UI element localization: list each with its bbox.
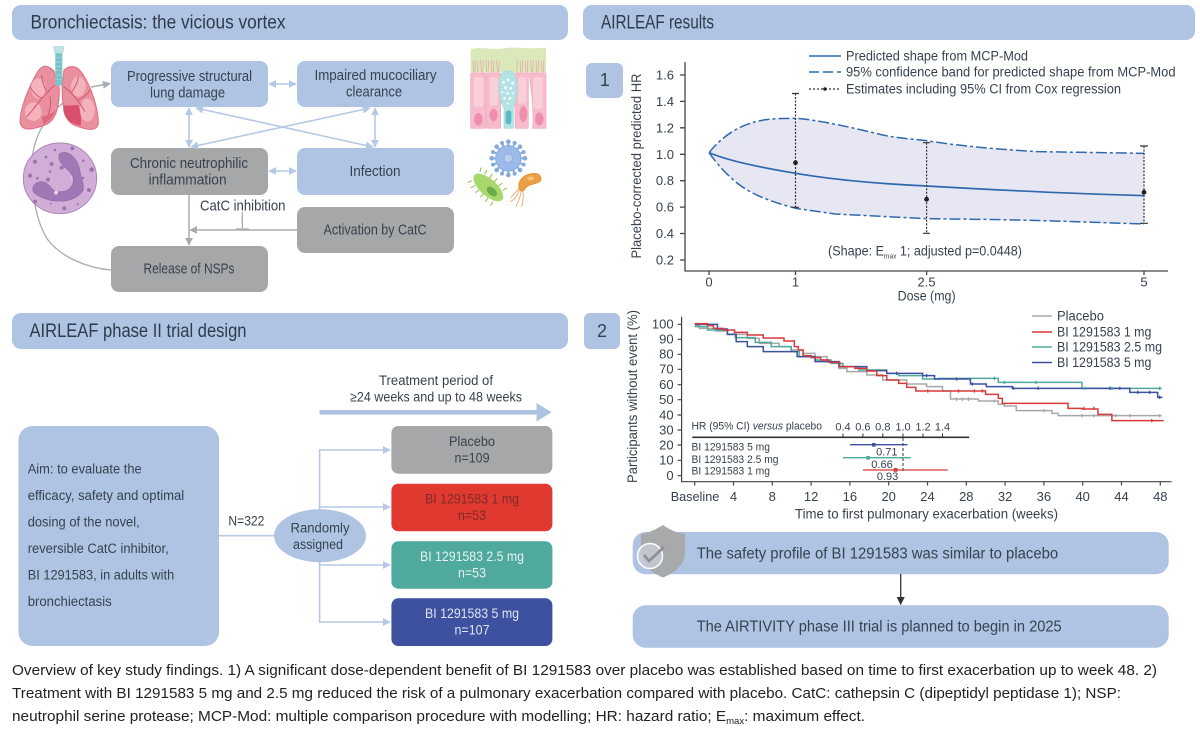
heading: results bbox=[583, 5, 1195, 40]
badge: 2 bbox=[584, 313, 620, 349]
node: randomly assigned: assigned bbox=[293, 537, 343, 552]
legend bbox=[1032, 308, 1162, 370]
chart: dose response bbox=[629, 48, 1176, 304]
x axis tick labels: 28 bbox=[959, 489, 974, 504]
arm: 2.5 mg bbox=[391, 541, 552, 589]
axes bbox=[680, 62, 1168, 275]
y axis title: Placebo-corrected predicted HR bbox=[629, 73, 644, 258]
y axis title: Participants without event (%) bbox=[625, 310, 640, 483]
box: study aim: efficacy, safety and optimal bbox=[28, 488, 184, 503]
box: study aim: BI 1291583, in adults with bbox=[28, 568, 174, 582]
box: structural lung damage: lung damage bbox=[150, 86, 225, 102]
inset: hazard ratio forest plot bbox=[692, 420, 969, 483]
x axis tick labels: 48 bbox=[1153, 489, 1168, 504]
inset: hazard ratio forest plot: BI 1291583 2.5 mg bbox=[692, 454, 778, 466]
badge: 1: 1 bbox=[600, 70, 610, 90]
box: infection: Infection bbox=[350, 164, 400, 180]
icon: bacterium bbox=[466, 166, 511, 209]
y axis tick labels: 80 bbox=[659, 347, 674, 362]
y axis tick labels: 0.2 bbox=[656, 252, 674, 268]
x axis tick labels: 8 bbox=[769, 489, 776, 504]
icon: virus bbox=[489, 139, 527, 177]
box: activation by CatC bbox=[297, 207, 454, 253]
box: impaired clearance bbox=[297, 61, 454, 107]
y axis tick labels: 90 bbox=[659, 332, 674, 347]
label: treatment period: ≥24 weeks and up to 48 weeks bbox=[350, 390, 522, 404]
y axis tick labels: 10 bbox=[659, 453, 674, 468]
label: treatment period: Treatment period of bbox=[379, 373, 493, 388]
arm: 2.5 mg: BI 1291583 2.5 mg bbox=[420, 549, 524, 564]
y axis tick labels: 0.4 bbox=[656, 226, 674, 241]
arm: 5 mg bbox=[391, 598, 552, 646]
x axis tick labels: Baseline bbox=[671, 489, 719, 504]
legend: Placebo bbox=[1057, 308, 1104, 324]
heading: vortex: Bronchiectasis: the vicious vortex bbox=[30, 12, 286, 34]
box: impaired clearance: Impaired mucociliary bbox=[314, 68, 437, 84]
x axis tick labels: 40 bbox=[1075, 489, 1090, 504]
x axis tick labels: 32 bbox=[998, 489, 1012, 504]
inset: hazard ratio forest plot: 1.2 bbox=[915, 422, 931, 434]
inset: hazard ratio forest plot: BI 1291583 5 mg bbox=[692, 442, 770, 454]
arrow: inflammation to NSP release bbox=[188, 195, 190, 245]
panel: trial design bbox=[12, 313, 568, 646]
y axis tick labels: 1.2 bbox=[656, 120, 674, 135]
legend: BI 1291583 1 mg bbox=[1057, 324, 1151, 340]
inset: hazard ratio forest plot: 0.66 bbox=[871, 459, 893, 471]
x axis tick labels: 16 bbox=[843, 489, 857, 504]
arm: placebo: Placebo bbox=[449, 434, 495, 449]
icon: neutrophil bbox=[23, 143, 97, 214]
y axis tick labels: 40 bbox=[659, 407, 674, 422]
icon: lungs bbox=[20, 47, 98, 129]
x axis tick labels bbox=[705, 274, 1148, 290]
box: release of NSPs bbox=[111, 246, 268, 292]
callout: safety profile bbox=[633, 532, 1169, 574]
inset: hazard ratio forest plot: HR (95% CI) versus placebo bbox=[692, 420, 822, 432]
node: randomly assigned: Randomly bbox=[290, 520, 350, 536]
node: randomly assigned bbox=[274, 509, 366, 562]
label: treatment period bbox=[350, 373, 522, 404]
arm: placebo bbox=[391, 426, 552, 474]
box: structural lung damage: Progressive structural bbox=[127, 69, 252, 85]
arrow: treatment period bbox=[320, 403, 552, 422]
y axis tick labels: 1.0 bbox=[656, 147, 674, 162]
arm: 2.5 mg: n=53 bbox=[458, 566, 486, 580]
heading: trial design bbox=[12, 313, 568, 349]
x axis tick labels: 36 bbox=[1037, 489, 1051, 504]
label: CatC inhibition: CatC inhibition bbox=[200, 198, 286, 214]
arm: 5 mg: n=107 bbox=[454, 622, 490, 638]
x axis tick labels: 1 bbox=[792, 274, 799, 290]
panel: vicious vortex bbox=[12, 5, 568, 292]
heading: results: AIRLEAF results bbox=[601, 12, 714, 34]
annotation: shape: (Shape: E bbox=[828, 244, 888, 258]
caption: overview of findings: : maximum effect. bbox=[744, 709, 865, 725]
badge: 1 bbox=[586, 63, 623, 98]
heading: trial design: AIRLEAF phase II trial design bbox=[30, 321, 246, 342]
caption: overview of findings: Overview of key study findings. 1) A significant dose-dependent benefit of BI 1291583 over placebo was established based on time to first exacerbation up to week 48. 2) bbox=[12, 663, 1157, 679]
callout: phase III: The AIRTIVITY phase III trial is planned to begin in 2025 bbox=[697, 618, 1062, 636]
inset: hazard ratio forest plot: 0.71 bbox=[876, 446, 898, 458]
box: neutrophilic inflammation: Chronic neutrophilic bbox=[130, 156, 248, 172]
y axis tick labels: 70 bbox=[659, 362, 674, 377]
band and predicted lines bbox=[709, 118, 1144, 224]
legend: BI 1291583 5 mg bbox=[1057, 355, 1151, 370]
arrows: allocation tree bbox=[320, 450, 390, 622]
box: release of NSPs: Release of NSPs bbox=[144, 262, 234, 278]
box: study aim: bronchiectasis bbox=[28, 594, 112, 609]
callout: safety profile: The safety profile of BI 1291583 was similar to placebo bbox=[697, 546, 1058, 562]
box: impaired clearance: clearance bbox=[346, 84, 402, 100]
x axis tick labels: 44 bbox=[1114, 489, 1129, 504]
y axis tick labels: 0 bbox=[666, 468, 674, 483]
y axis tick labels: 0.6 bbox=[656, 200, 674, 215]
y axis tick labels bbox=[652, 317, 674, 483]
box: study aim: Aim: to evaluate the bbox=[28, 462, 142, 476]
arm: 1 mg bbox=[391, 484, 552, 531]
annotation: shape: 1; adjusted p=0.0448) bbox=[896, 244, 1022, 258]
label: N=322: N=322 bbox=[228, 514, 264, 528]
panel: AIRLEAF results bbox=[583, 5, 1195, 648]
arm: 5 mg: BI 1291583 5 mg bbox=[425, 606, 519, 621]
y axis tick labels: 60 bbox=[659, 377, 674, 392]
y axis tick labels: 100 bbox=[652, 317, 674, 332]
legend: BI 1291583 2.5 mg bbox=[1057, 340, 1162, 354]
arm: 1 mg: BI 1291583 1 mg bbox=[425, 492, 519, 506]
x axis tick labels: 12 bbox=[804, 489, 818, 504]
arrow: activation by CatC bbox=[190, 229, 297, 231]
x axis tick labels: 5 bbox=[1140, 274, 1148, 290]
inset: hazard ratio forest plot: 0.4 bbox=[835, 422, 851, 434]
x axis tick labels: 24 bbox=[920, 489, 935, 504]
y axis tick labels: 0.8 bbox=[656, 173, 674, 188]
y axis tick labels bbox=[656, 68, 674, 268]
y axis tick labels: 20 bbox=[659, 437, 674, 452]
connector: aim to randomisation bbox=[219, 535, 275, 537]
inset: hazard ratio forest plot: 0.8 bbox=[875, 422, 890, 434]
caption: overview of findings: neutrophil serine protease; MCP-Mod: multiple comparison procedure with modelling; HR: hazard ratio; E bbox=[12, 709, 687, 725]
survival curves bbox=[695, 324, 1164, 422]
inset: hazard ratio forest plot: 0.6 bbox=[855, 422, 871, 434]
legend: Estimates including 95% CI from Cox regression bbox=[846, 82, 1121, 96]
y axis tick labels: 1.4 bbox=[656, 94, 674, 109]
x axis tick labels bbox=[671, 489, 1168, 504]
badge: 2: 2 bbox=[597, 321, 607, 341]
y axis tick labels: 50 bbox=[659, 392, 674, 407]
caption: overview of findings bbox=[12, 663, 1157, 726]
box: infection bbox=[297, 148, 454, 195]
caption: overview of findings: Treatment with BI 1291583 5 mg and 2.5 mg reduced the risk of a pulmonary exacerbation compared with placebo. CatC: cathepsin C (dipeptidyl peptidase 1); NSP: bbox=[12, 686, 1121, 702]
legend: Predicted shape from MCP-Mod bbox=[846, 48, 1028, 64]
x axis tick labels: 0 bbox=[705, 274, 713, 290]
y axis tick labels: 30 bbox=[659, 422, 674, 437]
box: neutrophilic inflammation bbox=[111, 148, 268, 195]
x axis title: Time to first pulmonary exacerbation (weeks) bbox=[795, 506, 1058, 522]
box: activation by CatC: Activation by CatC bbox=[324, 222, 426, 238]
chart: time to first exacerbation bbox=[625, 308, 1172, 522]
annotation: shape: max bbox=[884, 254, 897, 260]
inset: hazard ratio forest plot: BI 1291583 1 mg bbox=[692, 466, 770, 478]
arm: 1 mg: n=53 bbox=[458, 508, 486, 523]
box: study aim: dosing of the novel, bbox=[28, 514, 140, 530]
icon: safety shield bbox=[638, 525, 685, 578]
heading: vortex bbox=[12, 5, 568, 40]
inhibition bar bbox=[236, 212, 249, 229]
arm: placebo: n=109 bbox=[454, 450, 490, 466]
curved feedback line from NSP release to lungs bbox=[32, 103, 111, 270]
callout: phase III bbox=[633, 605, 1169, 648]
Cox estimates with error bars bbox=[792, 94, 1148, 233]
arrows: light-blue vicious-cycle links bbox=[189, 84, 375, 171]
arrow: lungs to structural damage bbox=[91, 84, 110, 87]
legend: 95% confidence band for predicted shape from MCP-Mod bbox=[846, 64, 1176, 80]
box: neutrophilic inflammation: inflammation bbox=[149, 172, 227, 188]
x axis tick labels: 4 bbox=[730, 489, 737, 504]
icon: airway epithelium bbox=[471, 48, 546, 128]
box: study aim: reversible CatC inhibitor, bbox=[28, 541, 169, 556]
inset: hazard ratio forest plot: 0.93 bbox=[877, 471, 898, 483]
x axis title: Dose (mg) bbox=[898, 288, 956, 304]
axes bbox=[678, 317, 1172, 486]
confidence band bbox=[709, 118, 1144, 224]
x axis tick labels: 2.5 bbox=[918, 274, 936, 290]
icon: fungus bbox=[510, 173, 541, 207]
inset: hazard ratio forest plot: 1.0 bbox=[895, 422, 911, 434]
x axis tick labels: 20 bbox=[881, 489, 896, 504]
y axis tick labels: 1.6 bbox=[656, 68, 674, 82]
box: structural lung damage bbox=[111, 61, 268, 107]
box: study aim bbox=[18, 426, 219, 646]
legend bbox=[809, 48, 1176, 96]
caption: overview of findings: max bbox=[726, 716, 745, 726]
arrow: safety to phase III bbox=[897, 574, 905, 605]
inset: hazard ratio forest plot: 1.4 bbox=[935, 422, 950, 434]
